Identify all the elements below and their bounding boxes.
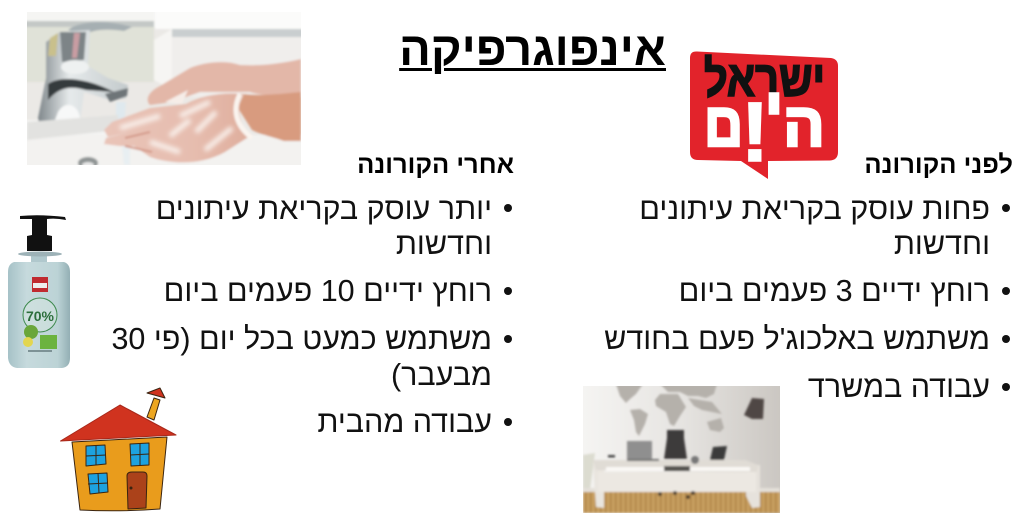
logo word: today: י <box>765 76 783 145</box>
pendant lamp <box>744 398 764 419</box>
product label <box>23 277 57 352</box>
left column list: וחדשות <box>396 227 492 261</box>
bullet: alcohol gel: משתמש באלכוג'ל פעם בחודש <box>604 322 990 356</box>
icon: house <box>60 388 176 512</box>
phone <box>710 446 727 460</box>
bullet: office work: עבודה במשרד <box>808 370 990 404</box>
icon: sanitizer bottle <box>8 215 70 368</box>
left column heading: after corona: אחרי הקורונה <box>357 151 514 179</box>
laptop <box>627 441 652 459</box>
bullet: daily use: משתמש כמעט בכל יום (פי 30 <box>111 322 492 356</box>
logo word: today: ם <box>704 91 743 160</box>
icon: hands with soap <box>104 59 301 162</box>
world map <box>616 384 724 436</box>
right column list: וחדשות <box>894 227 990 261</box>
title: אינפוגרפיקה <box>399 22 666 75</box>
bullet: reads more: יותר עוסק בקריאת עיתונים <box>156 192 492 226</box>
bullet: reads less: פחות עוסק בקריאת עיתונים <box>639 192 990 226</box>
logo word: today: ! <box>741 85 769 179</box>
chair <box>664 430 687 459</box>
product label: 70% <box>26 308 55 324</box>
right column heading: before corona: לפני הקורונה <box>864 151 1013 179</box>
bullet: washes hands 10 times: רוחץ ידיים 10 פעמים ביום <box>164 274 492 308</box>
bullet: work from home: עבודה מהבית <box>317 405 492 439</box>
logo: Israel Hayom <box>690 51 838 179</box>
desk <box>593 460 760 508</box>
logo word: today <box>704 76 825 179</box>
bullet: washes hands 3 times: רוחץ ידיים 3 פעמים ביום <box>679 274 990 308</box>
left column list <box>111 192 512 439</box>
photo: hands washing under a faucet <box>27 12 301 165</box>
icon: faucet <box>38 22 132 128</box>
left column list: מבעבר) <box>391 358 492 392</box>
right column list <box>604 192 1010 404</box>
photo: office desk <box>583 386 780 513</box>
logo word: today: ה <box>783 91 825 160</box>
